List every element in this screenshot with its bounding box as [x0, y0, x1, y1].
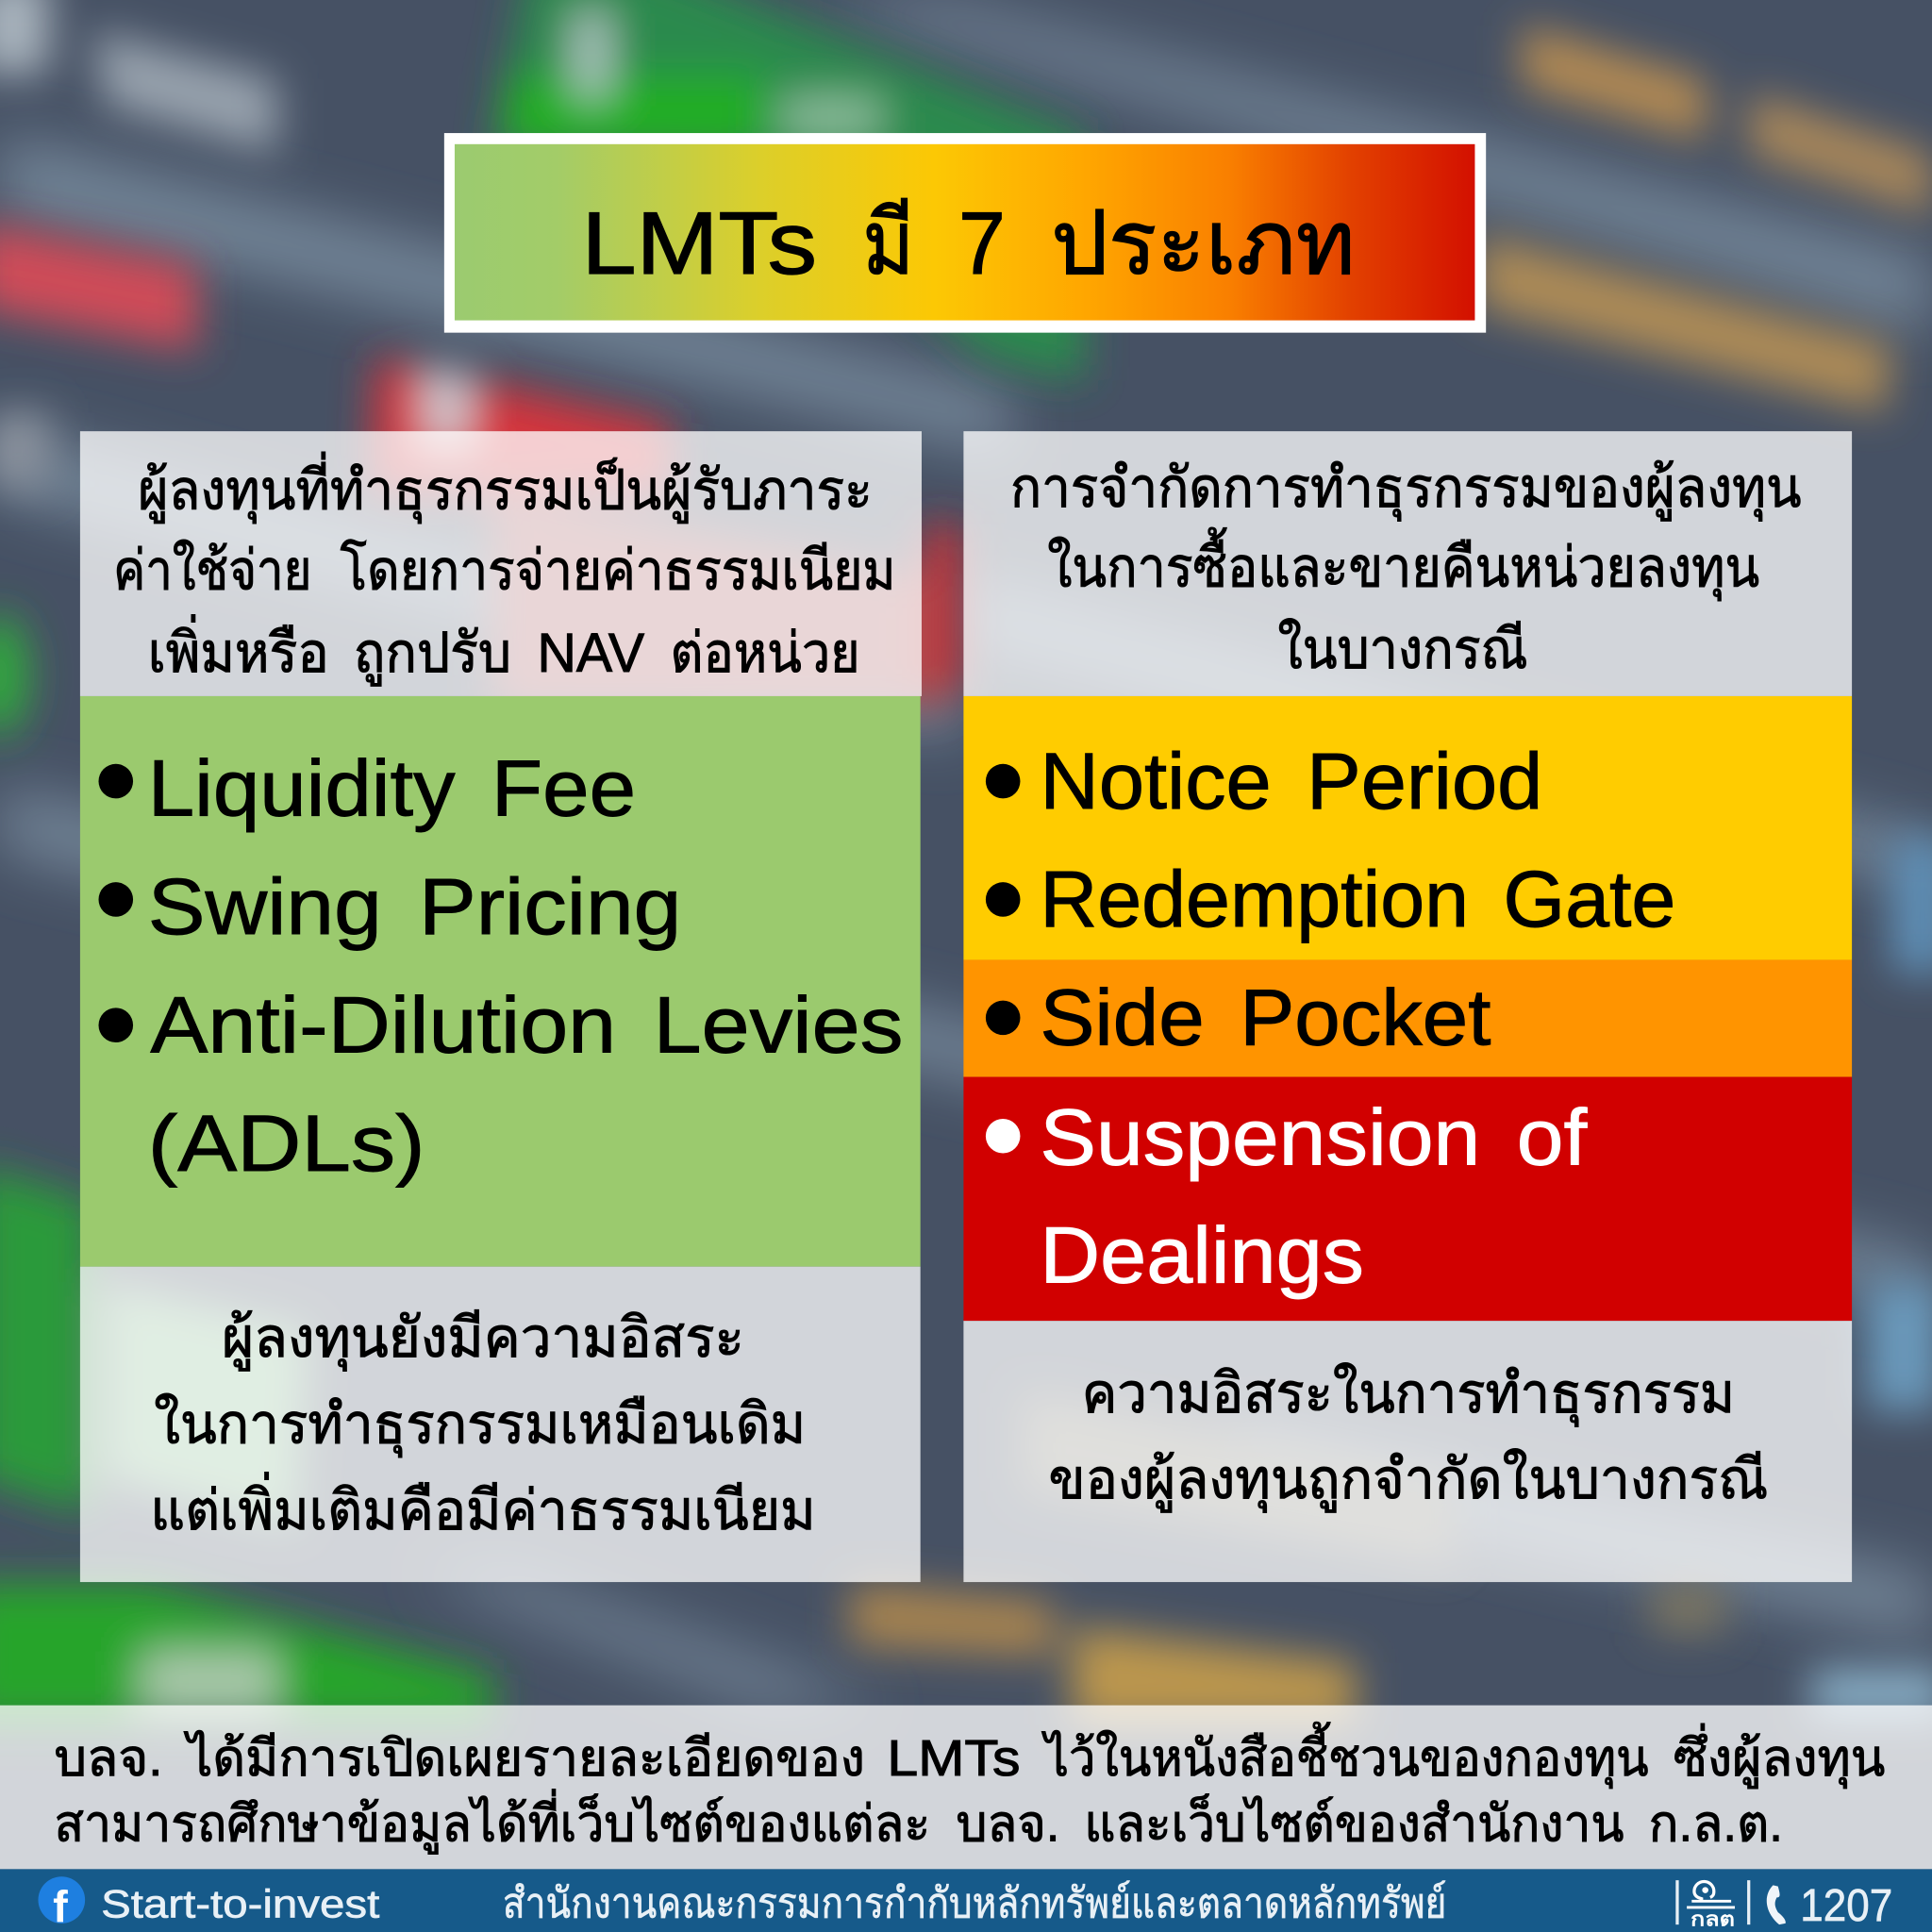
orange row: side pocket: Side Pocket — [1040, 973, 1491, 1062]
right intro block — [963, 431, 1852, 696]
hotline number: 1207 — [1800, 1880, 1892, 1931]
disclosure note strip: ก.ล.ต. — [1649, 1796, 1783, 1852]
left intro block: NAV — [537, 623, 644, 684]
disclosure note strip: ได้มีการเปิดเผยรายละเอียดของ — [184, 1730, 865, 1787]
left intro block: ผู้ลงทุนที่ทำธุรกรรมเป็นผู้รับภาระ — [138, 451, 873, 524]
left conclusion block: ในการทำธุรกรรมเหมือนเดิม — [154, 1392, 806, 1457]
panel: left column, fee-based tools — [80, 431, 922, 1582]
red row: suspension of dealings: Dealings — [1040, 1210, 1364, 1300]
disclosure note strip: สามารถศึกษาข้อมูลได้ที่เว็บไซต์ของแต่ละ — [54, 1789, 930, 1854]
green list of fee tools — [80, 696, 921, 1267]
orange row: side pocket — [963, 959, 1852, 1077]
panel: right column, limit-based tools — [963, 431, 1852, 1582]
left intro block: ค่าใช้จ่าย — [113, 539, 311, 601]
right intro block: ในการซื้อและขายคืนหน่วยลงทุน — [1047, 528, 1759, 602]
disclosure note strip: และเว็บไซต์ของสำนักงาน — [1084, 1793, 1624, 1852]
icon: facebook: f — [53, 1882, 68, 1932]
icon: phone — [1767, 1885, 1786, 1924]
footer bar — [0, 1869, 1932, 1932]
left intro block: ต่อหน่วย — [671, 623, 860, 684]
yellow list: notice period and redemption gate: Notice Period — [1040, 736, 1542, 825]
agency name: สำนักงานคณะกรรมการกำกับหลักทรัพย์และตลาดหลักทรัพย์ — [503, 1880, 1446, 1926]
green list of fee tools: Swing Pricing — [148, 861, 681, 951]
disclosure note strip: LMTs — [887, 1731, 1020, 1787]
left conclusion block: ผู้ลงทุนยังมีความอิสระ — [222, 1307, 744, 1372]
icon: facebook — [38, 1876, 85, 1932]
yellow list: notice period and redemption gate: Redemption Gate — [1040, 854, 1675, 943]
green list of fee tools: (ADLs) — [148, 1098, 425, 1188]
left intro block: โดยการจ่ายค่าธรรมเนียม — [340, 538, 896, 601]
left intro block: ถูกปรับ — [354, 623, 511, 686]
title text: 7 — [958, 193, 1006, 292]
red row: suspension of dealings: Suspension of — [1040, 1091, 1588, 1181]
disclosure note strip: บลจ. — [957, 1796, 1059, 1852]
left intro block: เพิ่มหรือ — [148, 614, 329, 684]
title text: มี — [862, 193, 914, 292]
green list of fee tools: Anti-Dilution Levies — [150, 979, 903, 1069]
right conclusion block: ของผู้ลงทุนถูกจำกัดในบางกรณี — [1049, 1448, 1768, 1513]
left intro block — [80, 431, 922, 696]
disclosure note strip: ไว้ในหนังสือชี้ชวนของกองทุน — [1041, 1722, 1649, 1789]
right conclusion block: ความอิสระในการทำธุรกรรม — [1082, 1362, 1735, 1427]
SEC logo: กลต — [1690, 1908, 1735, 1930]
left conclusion block — [80, 1267, 921, 1582]
green list of fee tools: Liquidity Fee — [148, 743, 636, 833]
facebook page name: Start-to-invest — [101, 1881, 380, 1925]
title banner — [444, 133, 1486, 333]
disclosure note strip: บลจ. — [54, 1731, 162, 1787]
disclosure note strip: ซึ่งผู้ลงทุน — [1674, 1724, 1885, 1789]
title text: LMTs — [581, 193, 817, 292]
red row: suspension of dealings — [963, 1077, 1852, 1321]
right intro block: การจำกัดการทำธุรกรรมของผู้ลงทุน — [1010, 458, 1802, 522]
right conclusion block — [963, 1321, 1852, 1582]
title text: ประเภท — [1051, 193, 1356, 292]
left conclusion block: แต่เพิ่มเติมคือมีค่าธรรมเนียม — [150, 1472, 816, 1541]
SEC logo — [1675, 1880, 1750, 1930]
title text — [581, 193, 1356, 292]
disclosure note strip — [0, 1706, 1932, 1869]
yellow list: notice period and redemption gate — [963, 696, 1852, 959]
right intro block: ในบางกรณี — [1277, 618, 1528, 680]
